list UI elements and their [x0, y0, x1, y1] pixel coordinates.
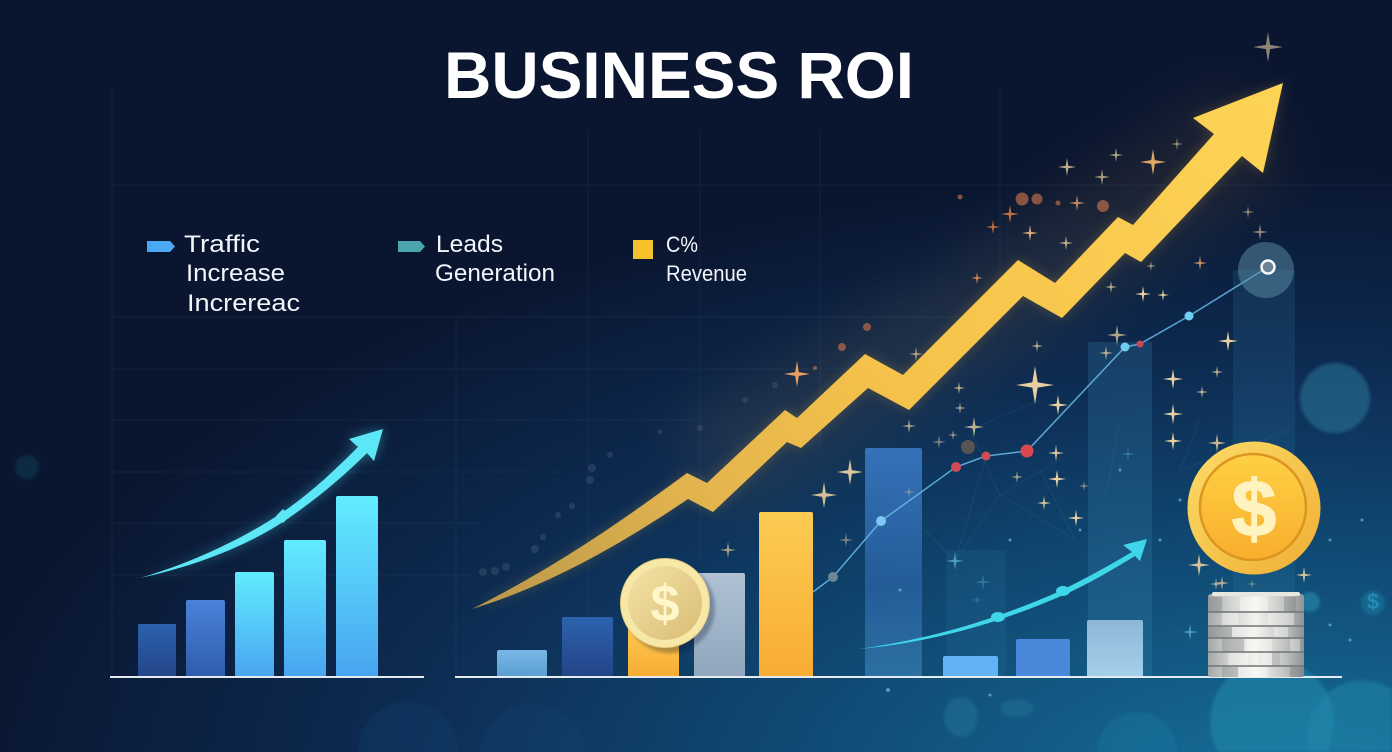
label: traffic increase: Increreac	[187, 290, 300, 317]
label: leads generation	[435, 231, 555, 287]
large gold coin: $	[1232, 464, 1276, 553]
label: traffic increase: Increase	[186, 260, 285, 287]
label: traffic increase	[184, 231, 300, 317]
label: revenue: Revenue	[666, 261, 747, 286]
small pale coin	[620, 558, 715, 653]
sparkles	[720, 32, 1312, 590]
legend: leads	[398, 231, 555, 287]
coin stack	[1208, 592, 1304, 677]
bars	[497, 512, 1143, 677]
central bar chart	[455, 270, 1342, 678]
legend: traffic	[147, 231, 300, 317]
left bar chart	[110, 429, 424, 678]
title: BUSINESS ROI	[444, 38, 914, 112]
highlighted point	[1238, 242, 1294, 298]
small teal arrow	[858, 539, 1147, 649]
label: revenue	[666, 232, 747, 286]
bars	[138, 496, 378, 677]
baseline	[455, 676, 1342, 678]
icon: leads marker	[398, 241, 425, 252]
large gold coin	[1188, 442, 1320, 574]
icon: traffic marker	[147, 241, 175, 252]
arrow: cyan trend	[140, 429, 383, 578]
legend: revenue	[633, 232, 747, 286]
icon: revenue marker	[633, 240, 653, 259]
label: traffic increase: Traffic	[184, 231, 260, 258]
main gold arrow	[472, 83, 1283, 609]
label: leads generation: Leads	[436, 231, 503, 258]
distant dotted trail	[479, 192, 1109, 576]
network line chart	[813, 242, 1294, 592]
ghost bars	[865, 270, 1295, 677]
label: leads generation: Generation	[435, 260, 555, 287]
label: revenue: C%	[666, 232, 698, 257]
small pale coin: $	[651, 575, 680, 633]
faint dollar mark: $	[1367, 589, 1379, 614]
baseline	[110, 676, 424, 678]
